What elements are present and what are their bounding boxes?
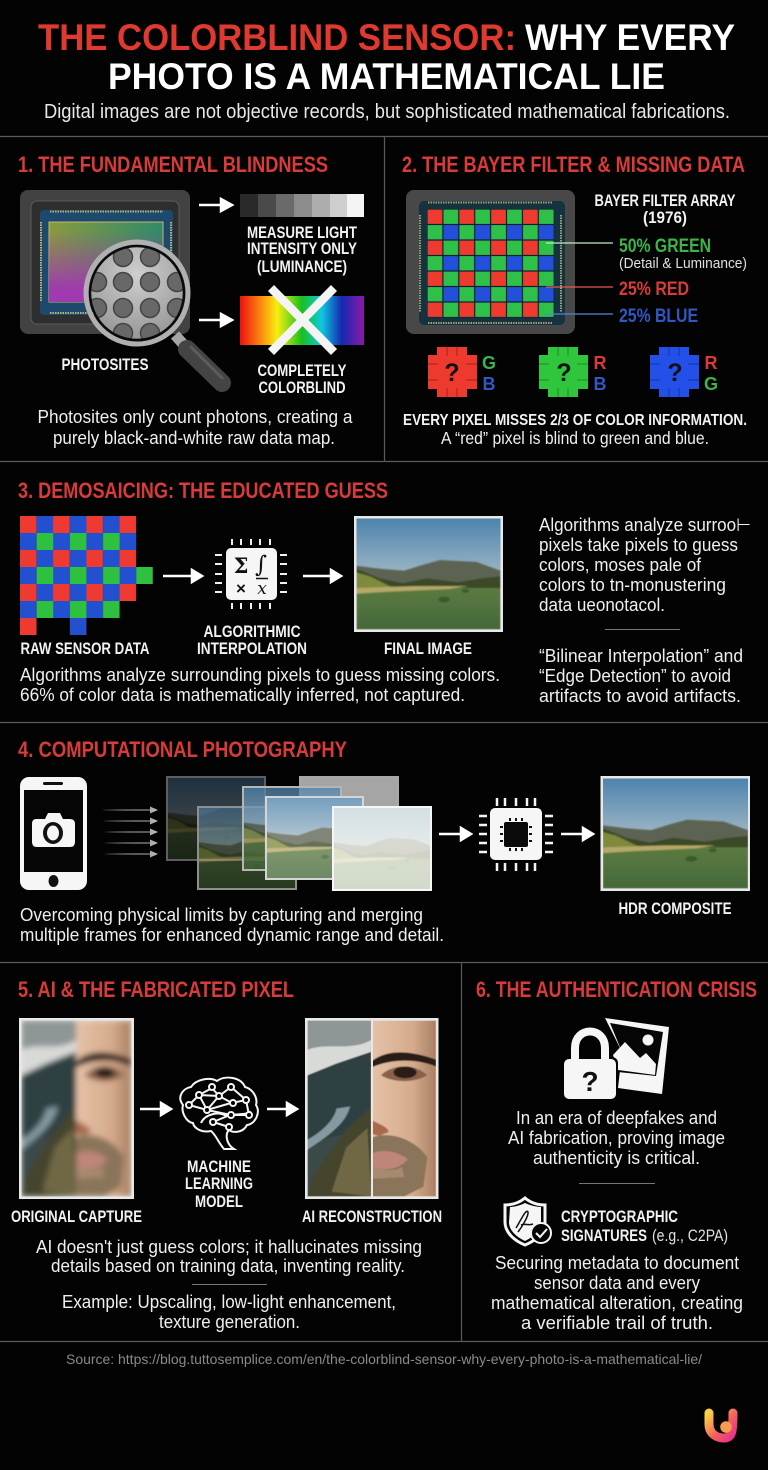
label: luminance [247,224,357,276]
crossed-out spectrum [240,288,364,352]
icon: green pixel missing red and blue: ? [556,359,572,387]
label: raw sensor data: RAW SENSOR DATA [20,640,150,658]
text: authenticity [508,1108,725,1184]
icon: smartphone with camera [20,777,87,890]
label: machine learning model [185,1158,253,1211]
arrow to luminance [199,199,232,211]
icon: algorithm chip: × [236,579,246,598]
heading 3: 3. DEMOSAICING: THE EDUCATED GUESS [18,478,388,503]
side note: data ueonotacol. [539,595,665,615]
icon: blue pixel missing red and green: R [704,353,718,373]
side note: “Edge Detection” to avoid [539,666,731,686]
side note: colors, moses pale of [539,555,702,575]
icon: red pixel missing green and blue: ? [444,359,460,387]
label: luminance: MEASURE LIGHT [247,224,357,242]
arrow [267,1103,297,1115]
body text 1: purely black-and-white raw data map. [53,428,335,448]
side note: “Bilinear Interpolation” and [539,646,743,666]
body text 4 [20,905,444,945]
side note: Algorithms analyze surroo⊢ [539,515,751,535]
side note: colors to tn-monustering [539,575,726,595]
label: algorithmic interpolation: INTERPOLATION [197,640,307,658]
icon: bayer sensor chip [406,190,575,334]
body text 6 [491,1253,743,1333]
hdr composite image [600,776,750,891]
side note: pixels take pixels to guess [539,535,738,555]
exposure stack [167,777,431,890]
callout: 50% green: (Detail & Luminance) [619,255,747,272]
text: authenticity: authenticity is critical. [533,1148,700,1168]
icon: blue pixel missing red and green [650,347,718,397]
panel: 1 fundamental blindness [18,152,364,448]
label: final image: FINAL IMAGE [384,640,472,658]
arrow [303,570,341,582]
side note [539,515,751,706]
text: authenticity: AI fabrication, proving image [508,1128,725,1148]
icon: blue pixel missing red and green: ? [667,359,683,387]
icon: red pixel missing green and blue [428,347,496,397]
label: original capture: ORIGINAL CAPTURE [11,1208,142,1226]
raw sensor mosaic [20,516,153,635]
label: luminance: (LUMINANCE) [257,258,347,276]
heading 1: 1. THE FUNDAMENTAL BLINDNESS [18,152,328,177]
arrow [561,828,593,840]
label: machine learning model: LEARNING [185,1175,253,1193]
grayscale bar [240,194,364,217]
text: cryptographic signatures [561,1207,728,1245]
icon: red pixel missing green and blue: B [482,374,496,394]
label: bayer filter array: BAYER FILTER ARRAY [594,192,736,210]
body text 6: a verifiable trail of truth. [521,1313,713,1333]
body text 1 [38,407,353,448]
label: bayer filter array: (1976) [643,209,687,227]
icon: photo with padlock: ? [581,1066,599,1097]
label: photosites: PHOTOSITES [62,356,148,374]
body text 4: Overcoming physical limits by capturing and merging [20,905,423,925]
label: luminance: INTENSITY ONLY [247,240,357,258]
text: cryptographic signatures: (e.g., C2PA) [652,1226,728,1245]
body text 5: texture generation. [159,1312,300,1332]
label: hdr composite: HDR COMPOSITE [618,900,732,918]
original capture image [19,1018,134,1199]
label: colorblind: COMPLETELY [258,362,346,380]
body text 5: AI doesn't just guess colors; it hallucinates missing [36,1237,422,1257]
icon: neural network brain [180,1078,258,1149]
panel: 4 computational photography [18,737,750,945]
arrow to spectrum [199,314,232,326]
body text 5: details based on training data, inventing reality. [51,1256,405,1276]
body text 5 [36,1237,422,1332]
arrows: multiple captures [103,806,158,858]
icon: photo with padlock [562,1018,669,1101]
heading 5: 5. AI & THE FABRICATED PIXEL [18,977,294,1002]
arrow [439,828,471,840]
icon: magnifier over photosites [86,242,222,383]
arrow [140,1103,171,1115]
text: cryptographic signatures: SIGNATURES [561,1226,647,1245]
text: cryptographic signatures: CRYPTOGRAPHIC [561,1207,678,1226]
panel: 6 authentication crisis [476,977,757,1333]
icon: algorithm chip: Σ [234,553,248,578]
body text 3: Algorithms analyze surrounding pixels to guess missing colors. [20,665,500,685]
icon: green pixel missing red and blue: R [594,353,606,373]
icon: red pixel missing green and blue: G [482,353,496,373]
label: machine learning model: MODEL [195,1193,243,1211]
panel: 2 bayer filter [402,152,747,448]
icon: processor chip [479,798,553,871]
arrow [163,570,202,582]
body text 4: multiple frames for enhanced dynamic range and detail. [20,925,444,945]
ai reconstruction image [305,1018,438,1199]
callout: 25% blue: 25% BLUE [619,306,698,327]
callout: 50% green: 50% GREEN [619,236,711,257]
body text 3 [20,665,500,705]
callout: 50% green [546,236,747,272]
icon: algorithm chip: x [257,579,267,599]
side note: artifacts to avoid artifacts. [539,686,741,706]
label: ai reconstruction: AI RECONSTRUCTION [302,1208,442,1226]
label: colorblind: COLORBLIND [258,379,346,397]
title: WHY EVERY [525,17,735,58]
icon: image sensor chip [20,190,190,334]
label: algorithmic interpolation [197,623,307,658]
body text 2: A “red” pixel is blind to green and blue. [441,428,709,448]
logo [709,1413,733,1438]
icon: algorithm chip [215,539,287,609]
callout: 25% red: 25% RED [619,279,689,300]
text: authenticity: In an era of deepfakes and [516,1108,717,1128]
icon: algorithm chip: ∫ [255,552,267,578]
body text 6: sensor data and every [534,1273,700,1293]
heading 4: 4. COMPUTATIONAL PHOTOGRAPHY [18,737,347,762]
body text 6: Securing metadata to document [495,1253,739,1273]
body text 1: Photosites only count photons, creating a [38,407,353,427]
panel: 5 ai fabricated pixel [11,977,442,1332]
icon: green pixel missing red and blue: B [594,374,606,394]
source line: Source: https://blog.tuttosemplice.com/en/the-colorblind-sensor-why-every-photo-is-a-mathematical-lie/ [66,1351,702,1367]
label: colorblind [258,362,346,397]
label: algorithmic interpolation: ALGORITHMIC [204,623,301,641]
body text 3: 66% of color data is mathematically inferred, not captured. [20,685,465,705]
body text 6: mathematical alteration, creating [491,1293,743,1313]
body text 5: Example: Upscaling, low-light enhancement, [62,1292,396,1312]
icon: signature shield [505,1198,551,1245]
icon: green pixel missing red and blue [539,347,606,397]
title: PHOTO IS A MATHEMATICAL LIE [108,56,665,97]
final image [354,516,503,632]
panel: 3 demosaicing [18,478,751,706]
icon: blue pixel missing red and green: G [704,374,718,394]
label: bayer filter array [594,192,736,227]
title [38,17,735,97]
body text 2 [403,412,747,448]
title: THE COLORBLIND SENSOR: [38,17,516,58]
label: machine learning model: MACHINE [187,1158,251,1176]
